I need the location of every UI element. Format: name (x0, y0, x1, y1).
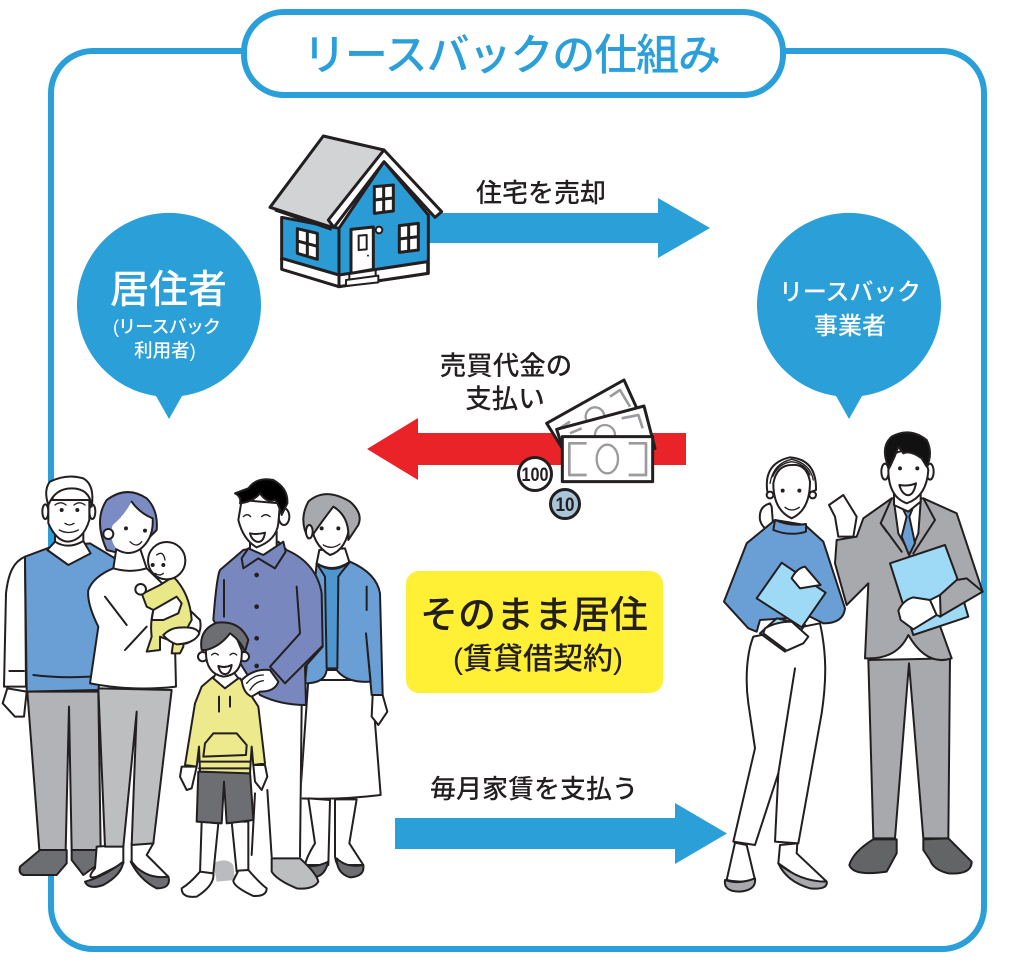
baby (135, 542, 192, 653)
title pill (244, 12, 783, 95)
speech bubble: leaseback operator: 事業者 (814, 313, 886, 340)
icon: 10 yen coin: 10 (556, 495, 574, 516)
woman in blue sweater (724, 457, 845, 892)
boy (180, 622, 278, 897)
arrow: pay monthly rent: 毎月家賃を支払う (430, 774, 638, 804)
icon: 100 yen coin (518, 458, 552, 490)
callout: continue living there (406, 571, 663, 693)
arrow: payment of sale price: 売買代金の (440, 351, 572, 381)
speech bubble: leaseback operator (757, 213, 941, 419)
arrow: sell house (425, 178, 710, 258)
icon: house (270, 136, 442, 287)
grandmother (300, 494, 387, 877)
man in gray suit (829, 432, 983, 874)
arrow: sell house: 住宅を売却 (476, 178, 606, 208)
callout: continue living there: (賃貸借契約) (453, 643, 623, 676)
father (213, 479, 323, 889)
illustration: family (3, 476, 387, 897)
speech bubble: resident: 居住者 (110, 269, 227, 312)
arrow: payment of sale price: 支払い (465, 384, 545, 414)
grandfather (3, 476, 115, 875)
speech bubble: leaseback operator: リースバック (779, 279, 921, 306)
icon: 10 yen coin (550, 490, 580, 518)
speech bubble: resident (77, 213, 261, 419)
icon: banknotes (547, 380, 655, 482)
speech bubble: resident: 利用者) (134, 340, 196, 361)
mother (85, 492, 201, 888)
arrow: pay monthly rent (395, 774, 727, 864)
speech bubble: resident: (リースバック (113, 317, 221, 337)
illustration: two staff members (724, 432, 983, 892)
title pill: リースバックの仕組み (303, 32, 721, 80)
callout: continue living there: そのまま居住 (420, 595, 648, 637)
arrow: payment of sale price (367, 351, 686, 480)
icon: 100 yen coin: 100 (522, 465, 548, 486)
